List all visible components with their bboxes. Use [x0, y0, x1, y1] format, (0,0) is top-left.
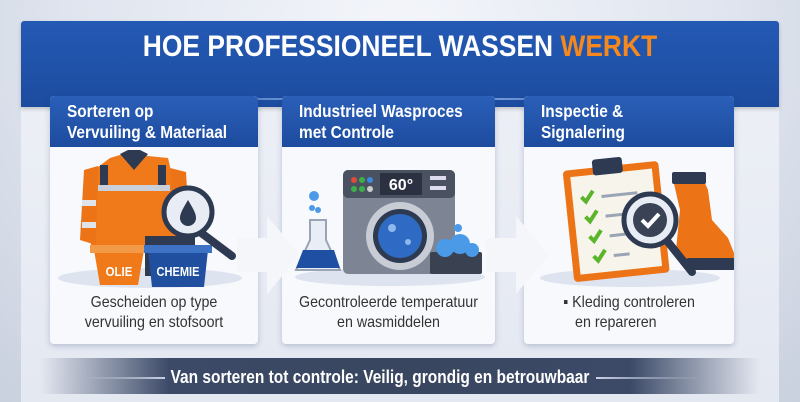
icon: jacket with bins and magnifier: OLIE [106, 264, 132, 279]
title: HOE PROFESSIONEEL WASSEN WERKT [143, 30, 657, 63]
caption: inspectie [563, 294, 695, 331]
heading: sorteren: Sorteren op [67, 101, 153, 121]
heading: wasproces: met Controle [299, 122, 394, 142]
panel: sorteren [50, 96, 258, 344]
heading: inspectie: Signalering [541, 122, 625, 142]
icon: jacket with bins and magnifier: CHEMIE [157, 264, 199, 279]
caption: wasproces [299, 294, 478, 331]
arrow 1 [258, 216, 282, 294]
icon: washing machine [294, 170, 485, 286]
icon: washing machine: 60° [389, 177, 413, 194]
heading: wasproces: Industrieel Wasproces [299, 101, 463, 121]
heading: sorteren: Vervuiling & Materiaal [67, 122, 227, 142]
arrow 2 [495, 216, 524, 294]
heading: sorteren [50, 96, 258, 147]
panel: wasproces [282, 96, 495, 344]
caption: wasproces: Gecontroleerde temperatuur [299, 294, 478, 311]
icon: clipboard, magnifier, boot [540, 157, 734, 287]
caption: inspectie: ▪ Kleding controleren [563, 294, 695, 311]
caption: sorteren: vervuiling en stofsoort [85, 314, 223, 331]
heading: inspectie: Inspectie & [541, 101, 623, 121]
bottom banner [40, 358, 760, 394]
header band [21, 21, 779, 107]
header underline glow [110, 98, 690, 100]
banner text: Van sorteren tot controle: Veilig, grondig en betrouwbaar [171, 367, 589, 387]
caption: wasproces: en wasmiddelen [337, 314, 440, 331]
banner lines [82, 377, 165, 379]
caption: sorteren [84, 294, 224, 331]
caption: sorteren: Gescheiden op type [91, 294, 217, 311]
panel: inspectie [524, 96, 734, 344]
heading: wasproces [282, 96, 495, 147]
caption: inspectie: en repareren [575, 314, 657, 331]
icon: jacket with bins and magnifier [58, 150, 242, 288]
heading: inspectie [524, 96, 734, 147]
